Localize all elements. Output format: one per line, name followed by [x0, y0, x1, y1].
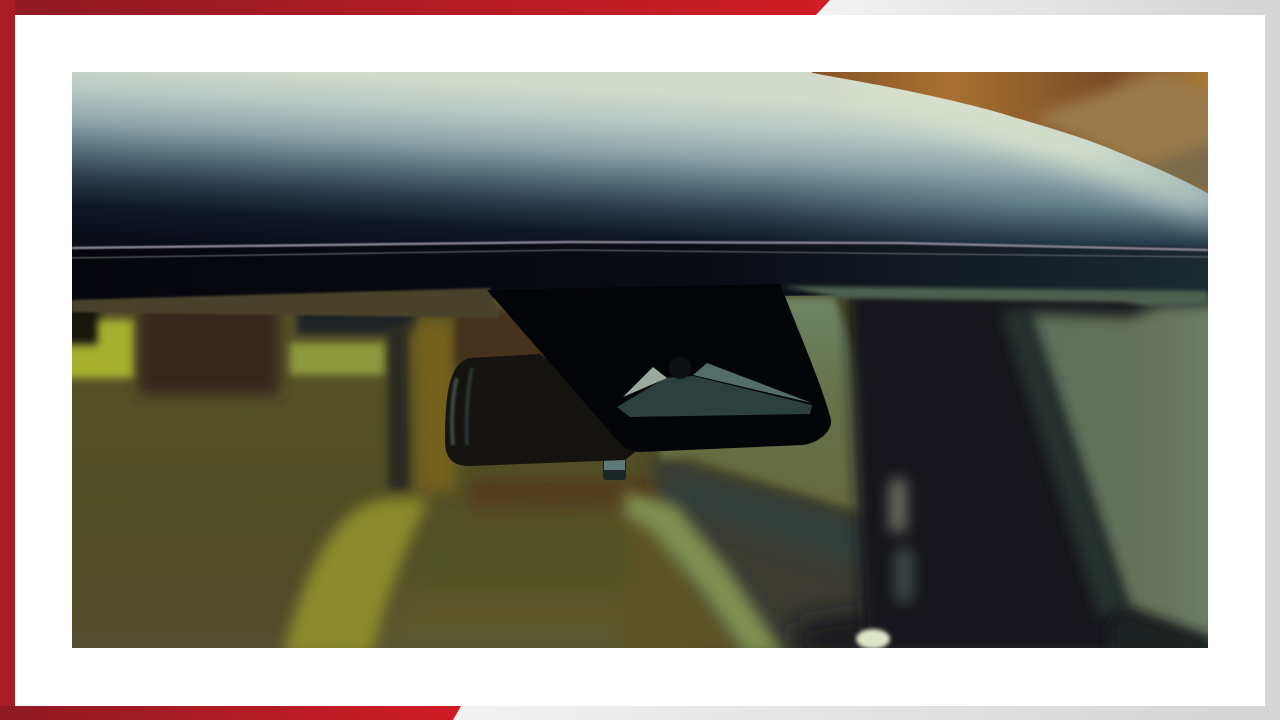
ledge left of camera [72, 288, 500, 318]
right roof lit edge [850, 85, 1220, 212]
pillar reflections [889, 478, 907, 533]
centre light patch [290, 343, 384, 375]
small window [660, 297, 868, 513]
white light spot [856, 629, 890, 649]
dark opening behind headrests [60, 300, 419, 490]
frame: grey top band [820, 0, 1280, 15]
frame: red top band [0, 0, 830, 15]
dark door panel [650, 457, 864, 648]
brown band below mirror [470, 480, 660, 516]
pillar bottom [1112, 606, 1208, 648]
front seat inner [624, 541, 739, 648]
front seat highlight [625, 492, 785, 655]
grey ledge right of camera [782, 286, 1208, 306]
yellow stripe of right headrest [412, 320, 457, 495]
camera housing [487, 284, 831, 452]
rear seat area, blurred [72, 304, 654, 648]
brown headrest behind mirror [452, 308, 547, 370]
left headrest [139, 303, 279, 395]
warm background top right [811, 72, 1208, 194]
rear-view mirror [445, 354, 650, 480]
door teal band [683, 482, 853, 552]
mirror stem [603, 457, 626, 480]
yellow seat edge [283, 498, 428, 655]
rear seat cushion [72, 631, 285, 648]
front seat [388, 505, 624, 648]
photo: car windshield with camera module [50, 60, 1220, 670]
roof trim strip [60, 240, 1220, 302]
side window and door [620, 290, 1220, 660]
pillar base [847, 290, 1215, 655]
camera lens prism [617, 357, 812, 417]
left yellow patch [60, 320, 135, 378]
side window right [1027, 303, 1220, 645]
interior base [690, 292, 1208, 648]
mirror highlights [452, 378, 457, 445]
frame: red left band [0, 0, 15, 720]
frame: grey bottom band [450, 706, 1280, 720]
frame: red bottom band [0, 706, 461, 720]
door lower shadow [790, 610, 880, 660]
frame: grey right band [1265, 0, 1280, 720]
pillar teal edge [1000, 310, 1127, 620]
car roof [72, 72, 1208, 250]
